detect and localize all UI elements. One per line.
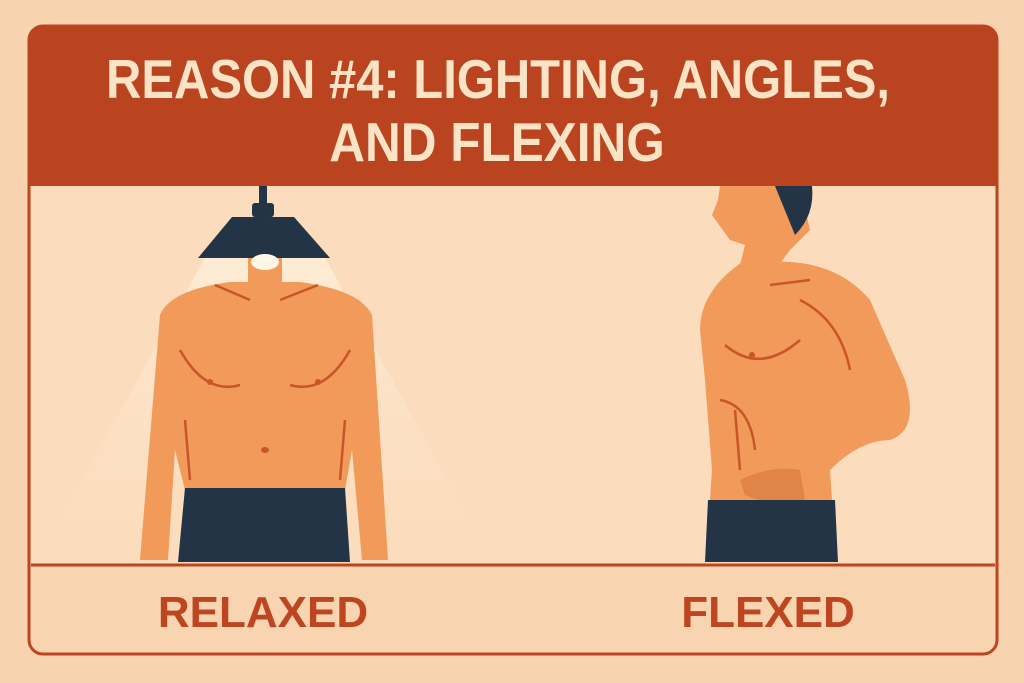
figure: flexed: [700, 186, 910, 562]
title: REASON #4: LIGHTING, ANGLES,: [106, 49, 890, 111]
figure: relaxed: [140, 235, 388, 562]
label: flexed: FLEXED: [681, 588, 855, 637]
label: relaxed: RELAXED: [158, 588, 368, 637]
header band: [29, 26, 997, 186]
title line 2: AND FLEXING: [329, 113, 665, 174]
icon: lamp: [198, 186, 330, 270]
light beam: [60, 258, 470, 520]
